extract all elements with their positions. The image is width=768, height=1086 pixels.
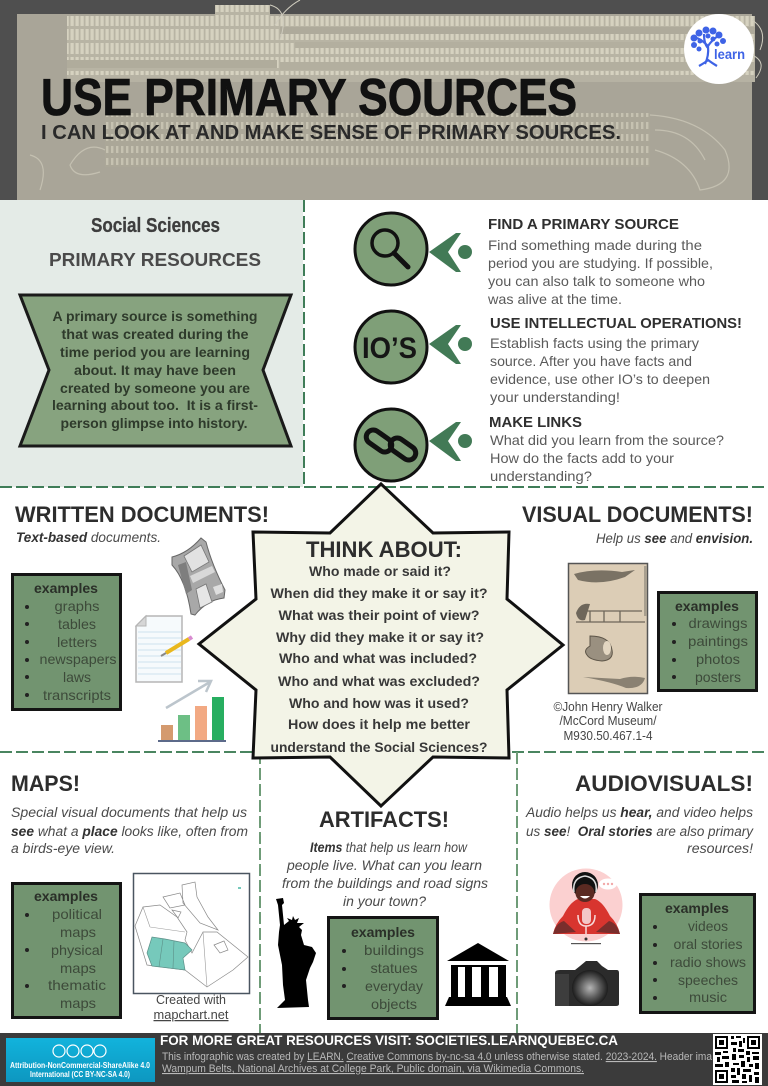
panel: written documents (12, 502, 269, 742)
icon: camera (555, 961, 619, 1006)
examples list: statues (370, 960, 418, 976)
heading: Primary Resources: PRIMARY RESOURCES (49, 250, 261, 270)
icon: IO'S badge (355, 311, 427, 383)
text block: from the buildings and road signs (282, 876, 488, 891)
callout: definition banner: that was created during the (62, 327, 249, 342)
text block: credits: Wampum Belts, National Archives at College Park, Public domain, via Wikimedia Commons. (162, 1063, 584, 1075)
text block: Special visual documents that help us (11, 805, 247, 820)
text block (11, 805, 248, 856)
examples list: paintings (688, 633, 748, 649)
callout: definition banner: about. It may have been (74, 363, 236, 378)
text block: credits (162, 1051, 713, 1075)
examples list (640, 894, 754, 1012)
text block (490, 335, 710, 405)
examples list: maps (60, 960, 96, 976)
text block: Items that help us learn how (310, 840, 468, 855)
step: make links (355, 409, 724, 484)
examples list: oral stories (674, 936, 742, 952)
examples list: examples (675, 598, 739, 614)
text block: Audio helps us hear, and video helps (525, 805, 753, 820)
examples list (328, 918, 438, 1018)
examples list: examples (34, 888, 98, 904)
examples list: posters (695, 669, 741, 685)
question list: Who and what was included? (279, 651, 477, 666)
icon: arrow (429, 233, 472, 272)
text block: understanding? (490, 468, 592, 484)
question list: Who made or said it? (309, 564, 451, 579)
text block: people live. What can you learn (286, 858, 482, 873)
examples list: examples (34, 580, 98, 596)
panel: artifacts (276, 807, 511, 1018)
panel: primary resources (0, 200, 303, 487)
panel: header banner (0, 0, 768, 200)
text block: evidence, use other IO’s to deepen (490, 371, 710, 387)
callout: definition banner: created by someone you are (60, 381, 251, 396)
panel: maps (11, 771, 250, 1022)
text block: us see! Oral stories are also primary (526, 824, 754, 839)
chart: rising bars (158, 681, 226, 742)
text block: see what a place looks like, often from (11, 824, 248, 839)
text block: Find something made during the (488, 237, 702, 253)
text block: in your town? (343, 894, 427, 909)
examples list: everyday (365, 978, 423, 994)
examples list: radio shows (670, 954, 746, 970)
caption (554, 700, 662, 743)
text block (490, 432, 724, 484)
examples list: letters (57, 634, 97, 650)
examples list: transcripts (43, 687, 111, 703)
subtitle: I CAN LOOK AT AND MAKE SENSE OF PRIMARY SOURCES. (41, 122, 621, 144)
text block: What did you learn from the source? (490, 432, 724, 448)
step: use intellectual operations (355, 311, 742, 405)
examples list: examples (351, 924, 415, 940)
examples list (658, 592, 756, 690)
examples list: physical (51, 942, 103, 958)
text block: Help us see and envision. (596, 531, 753, 546)
examples list: buildings (364, 942, 424, 958)
examples list: videos (688, 918, 728, 934)
text block: source. After you have facts and (490, 353, 692, 369)
heading: VISUAL DOCUMENTS! (522, 502, 753, 527)
examples list: music (689, 989, 727, 1005)
caption: /McCord Museum/ (560, 714, 657, 728)
text block: credits: This infographic was created by LEARN. Creative Commons by-nc-sa 4.0 unless otherwise stated. 2023-2024. Header ima (162, 1051, 713, 1063)
examples list: political (52, 906, 102, 922)
callout: definition banner: A primary source is something (52, 309, 258, 324)
panel: visual documents (522, 502, 756, 743)
text block: Establish facts using the primary (490, 335, 699, 351)
text block (525, 805, 754, 856)
examples list: tables (58, 616, 96, 632)
examples list: newspapers (40, 651, 116, 667)
heading: THINK ABOUT: (306, 537, 462, 562)
icon: statue of liberty (276, 898, 316, 1008)
text block: How do the facts add to your (490, 450, 674, 466)
text block: period you are studying. If possible, (488, 255, 713, 271)
icon: IO'S badge: IO’S (362, 332, 417, 365)
question list: Who and how was it used? (289, 696, 469, 711)
title: USE PRIMARY SOURCES (41, 69, 577, 127)
icon: newspaper (172, 538, 225, 615)
text block (282, 840, 488, 909)
question list: understand the Social Sciences? (270, 740, 488, 755)
icon: arrow (429, 422, 472, 461)
question list: When did they make it or say it? (270, 586, 488, 601)
examples list: maps (60, 924, 96, 940)
icon: museum building (445, 943, 511, 1006)
icon: paper and pencil (136, 616, 192, 682)
badge: Creative Commons licence: International (CC BY-NC-SA 4.0) (30, 1070, 130, 1079)
text block: a birds-eye view. (11, 841, 115, 856)
question list: What was their point of view? (278, 608, 480, 623)
icon: arrow (429, 325, 472, 364)
heading: USE INTELLECTUAL OPERATIONS! (490, 315, 742, 332)
text block: you can also talk to someone who (488, 273, 705, 289)
text block: Text-based documents. (16, 530, 161, 545)
text block: was alive at the time. (487, 291, 622, 307)
text block: your understanding! (490, 389, 620, 405)
question list: Who and what was excluded? (278, 674, 480, 689)
icon: podcaster (550, 868, 622, 944)
examples list: thematic (48, 977, 106, 993)
logo: LEARN (684, 14, 754, 84)
logo: LEARN: learn (714, 46, 745, 62)
examples list: photos (696, 651, 740, 667)
heading: FIND A PRIMARY SOURCE (488, 216, 679, 233)
caption (154, 993, 229, 1022)
heading: Social Sciences: Social Sciences (91, 215, 220, 237)
examples list (12, 574, 120, 710)
caption: Created with (156, 993, 226, 1007)
examples list: drawings (688, 615, 748, 631)
examples list: objects (371, 996, 417, 1012)
examples list: graphs (54, 598, 100, 614)
icon: magnifying glass (355, 213, 427, 285)
examples list (12, 884, 120, 1018)
image: upper wampum belt (67, 0, 763, 82)
badge: Creative Commons licence: Attribution-NonCommercial-ShareAlike 4.0 (10, 1061, 150, 1070)
callout: think about star (199, 484, 563, 806)
caption: ©John Henry Walker (554, 700, 662, 714)
text block: resources! (687, 841, 753, 856)
callout: definition banner: learning about too. It is a first- (52, 398, 258, 413)
image: snowshoe engraving (568, 564, 648, 694)
heading: MAKE LINKS (489, 414, 582, 431)
image: lower wampum belt (30, 113, 729, 190)
step: find a primary source (355, 213, 713, 307)
heading: ARTIFACTS! (319, 807, 449, 832)
question list: Why did they make it or say it? (276, 630, 484, 645)
caption: M930.50.467.1-4 (564, 729, 653, 743)
heading: WRITTEN DOCUMENTS! (15, 502, 269, 527)
heading: AUDIOVISUALS! (575, 771, 753, 796)
question list (270, 564, 488, 755)
badge: Creative Commons licence (6, 1038, 155, 1082)
examples list: speeches (678, 972, 738, 988)
caption: mapchart.net (154, 1008, 229, 1022)
heading: more resources: FOR MORE GREAT RESOURCES VISIT: SOCIETIES.LEARNQUEBEC.CA (160, 1032, 618, 1048)
panel: audiovisuals (525, 771, 754, 1012)
question list: How does it help me better (288, 717, 471, 732)
examples list: maps (60, 995, 96, 1011)
text block (487, 237, 713, 307)
icon: chain link (355, 409, 427, 481)
examples list: examples (665, 900, 729, 916)
icon: QR code (713, 1034, 762, 1085)
callout: definition banner: person glimpse into history. (60, 416, 247, 431)
map: Canada (134, 874, 250, 994)
callout: definition banner: time period you are learning (60, 345, 250, 360)
heading: MAPS! (11, 771, 80, 796)
panel: footer (0, 1032, 768, 1086)
examples list: laws (63, 669, 91, 685)
callout: definition banner (20, 295, 291, 446)
